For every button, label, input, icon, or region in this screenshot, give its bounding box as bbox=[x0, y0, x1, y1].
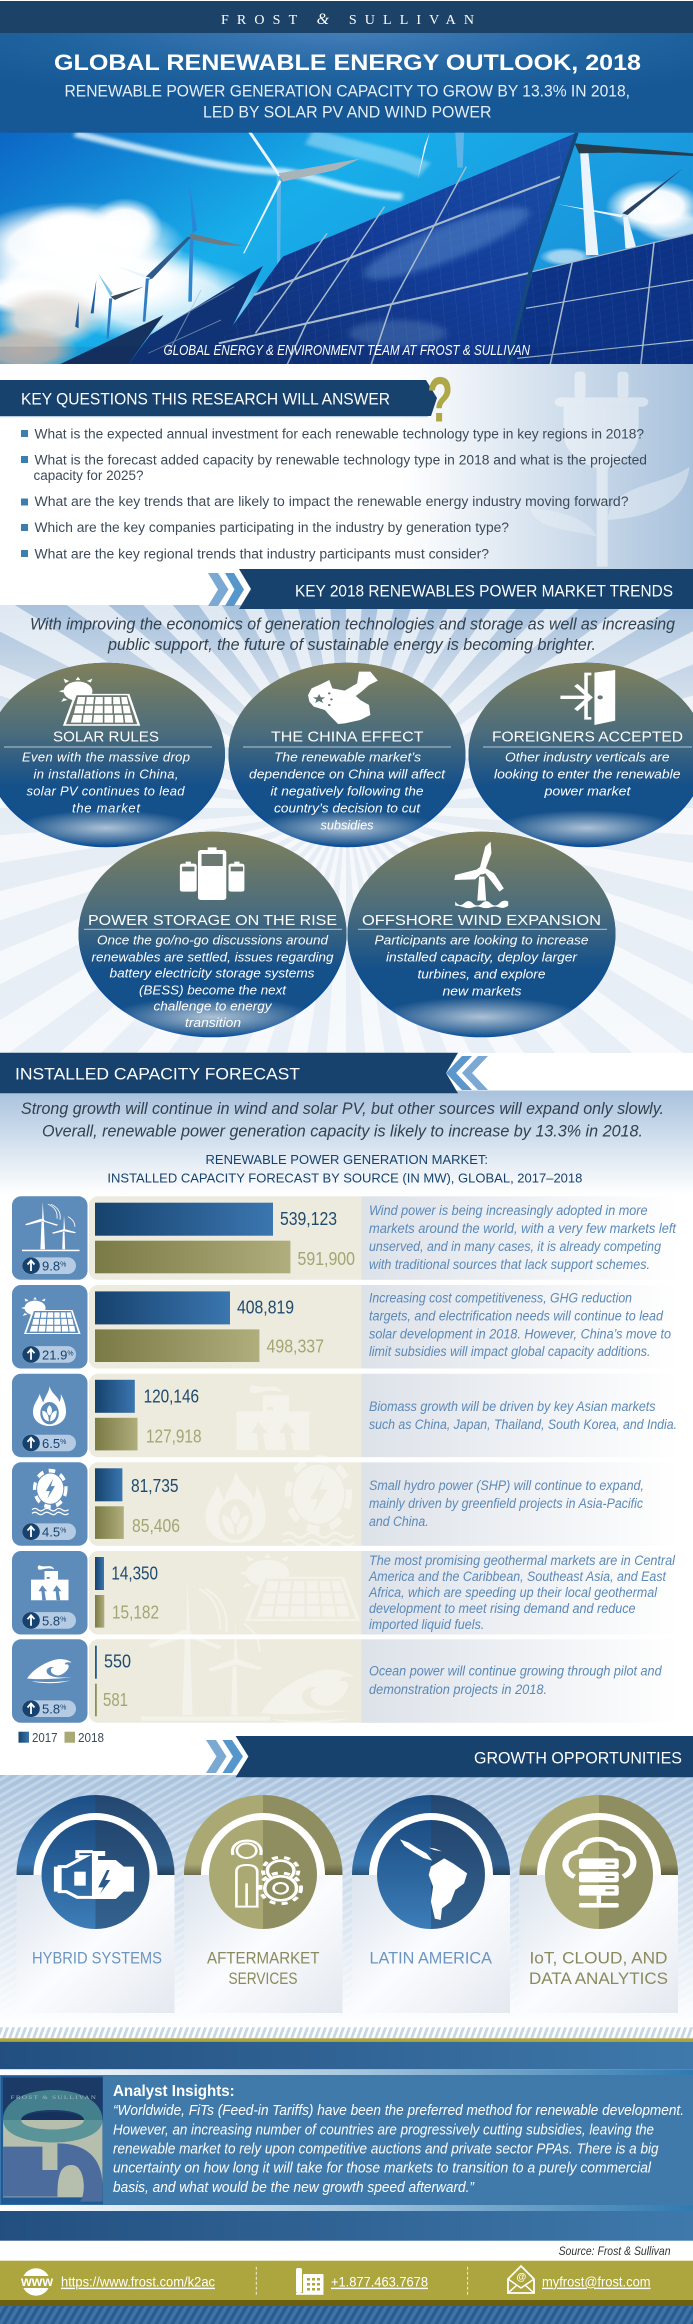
turbines bbox=[75, 133, 693, 338]
row: wind bbox=[12, 1196, 677, 1280]
chart title bbox=[107, 1152, 582, 1186]
report cover image bbox=[1, 2076, 103, 2204]
row: small hydro: 81,735 bbox=[131, 1475, 178, 1496]
growth badge bbox=[22, 1523, 76, 1540]
panel: key trends background with sunburst bbox=[0, 605, 693, 1053]
question list: What are the key regional trends that industry participants must consider? bbox=[34, 546, 489, 561]
circle: foreigners accepted: Other industry verticals are bbox=[505, 750, 670, 765]
circle: power storage on the rise: Once the go/no-go discussions around bbox=[97, 932, 329, 947]
commentary: wind bbox=[369, 1203, 677, 1272]
icon: telephone bbox=[296, 2268, 324, 2295]
card: aftermarket services bbox=[184, 1795, 342, 2013]
row: solar bbox=[12, 1285, 671, 1368]
icon: plug and leaf watermark bbox=[530, 372, 689, 567]
commentary: geothermal: development to meet rising demand and reduce bbox=[369, 1601, 636, 1616]
card: Latin America: LATIN AMERICA bbox=[370, 1949, 492, 1967]
section heading banner: KEY QUESTIONS THIS RESEARCH WILL ANSWER bbox=[21, 390, 390, 408]
row: ocean: 550 bbox=[104, 1650, 131, 1671]
growth badge: % bbox=[60, 1439, 66, 1446]
question list: What is the expected annual investment for each renewable technology type in key regions in 2018? bbox=[34, 426, 644, 441]
card label: DATA ANALYTICS bbox=[529, 1970, 668, 1988]
growth badge: 9.8 bbox=[42, 1259, 60, 1274]
commentary: solar: solar development in 2018. However, China’s move to bbox=[369, 1326, 671, 1341]
icon: email envelope bbox=[508, 2266, 534, 2293]
row: biomass: 127,918 bbox=[146, 1426, 202, 1447]
commentary: hydro: and China. bbox=[369, 1514, 429, 1529]
circle: power storage on the rise: battery electricity storage systems bbox=[110, 966, 315, 981]
growth badge: % bbox=[60, 1528, 66, 1535]
question list: What are the key trends that are likely to impact the renewable energy industry moving forward? bbox=[34, 494, 628, 509]
circle: solar rules bbox=[0, 663, 225, 847]
section banner: key 2018 trends bbox=[208, 569, 693, 609]
hero photo: solar panels and wind turbines bbox=[0, 133, 693, 373]
growth badge: % bbox=[67, 1350, 74, 1357]
circle: solar rules: solar PV continues to lead bbox=[26, 784, 185, 799]
circle: power storage on the rise: (BESS) become the next bbox=[139, 982, 287, 997]
main title: GLOBAL RENEWABLE ENERGY OUTLOOK, 2018 bbox=[54, 50, 641, 75]
section banner: growth opportunities: GROWTH OPPORTUNITIES bbox=[474, 1749, 682, 1767]
commentary: biomass: Biomass growth will be driven by key Asian markets bbox=[369, 1399, 656, 1414]
panel: analyst insights bbox=[0, 2027, 693, 2241]
icon: batteries bbox=[180, 847, 244, 900]
row: ocean bbox=[12, 1639, 662, 1723]
commentary: wind: markets around the world, with a very few markets left bbox=[369, 1221, 677, 1236]
icon: solar bbox=[21, 1297, 80, 1334]
commentary: hydro: mainly driven by greenfield projects in Asia-Pacific bbox=[369, 1496, 643, 1511]
section banner: installed capacity forecast bbox=[0, 1053, 693, 1093]
circle: solar rules: Even with the massive drop bbox=[22, 750, 190, 765]
circle: offshore wind expansion: Participants are looking to increase bbox=[374, 932, 588, 947]
question list bbox=[21, 426, 647, 561]
circle: the China effect: THE CHINA EFFECT bbox=[271, 729, 424, 746]
analyst quote: basis, and what would be the new growth speed afterward.” bbox=[113, 2179, 475, 2196]
icon: door and entering arrow bbox=[560, 670, 615, 725]
forecast intro text: Strong growth will continue in wind and solar PV, but other sources will expand only slowly. bbox=[21, 1099, 664, 1118]
growth badge bbox=[22, 1612, 76, 1629]
circle: the China effect: dependence on China will affect bbox=[249, 767, 446, 782]
growth badge: 21.9 bbox=[42, 1347, 67, 1362]
growth badge: 5.8 bbox=[42, 1613, 60, 1628]
panel: growth opportunities background bbox=[0, 1775, 693, 2027]
commentary: hydro bbox=[369, 1478, 644, 1529]
icon: ocean wave bbox=[27, 1659, 72, 1683]
circle: foreigners accepted: looking to enter the renewable bbox=[494, 767, 680, 782]
panel: installed capacity background bbox=[0, 1090, 693, 1194]
commentary: geothermal bbox=[368, 1553, 676, 1632]
circle: offshore wind expansion: installed capacity, deploy larger bbox=[386, 949, 578, 964]
growth badge: 5.8 bbox=[42, 1702, 60, 1717]
logo wordmark: FROST & SULLIVAN bbox=[221, 11, 474, 28]
circle: offshore wind expansion bbox=[348, 832, 616, 1037]
circle: the China effect: subsidies bbox=[320, 818, 374, 833]
commentary: geothermal: imported liquid fuels. bbox=[369, 1617, 484, 1632]
website link: https://www.frost.com/k2ac bbox=[61, 2274, 215, 2290]
row: geothermal bbox=[12, 1551, 676, 1634]
commentary: ocean bbox=[369, 1664, 662, 1697]
panels bbox=[60, 315, 164, 364]
circle: solar rules: the market bbox=[72, 801, 141, 816]
card: hybrid systems: HYBRID SYSTEMS bbox=[32, 1949, 162, 1967]
cover logotype: FROST & SULLIVAN bbox=[11, 2095, 96, 2101]
subtitle: LED BY SOLAR PV AND WIND POWER bbox=[203, 103, 492, 121]
analyst heading: Analyst Insights: bbox=[113, 2083, 235, 2100]
chart title: RENEWABLE POWER GENERATION MARKET: bbox=[206, 1152, 488, 1167]
icon: wind turbines bbox=[22, 1202, 80, 1251]
question list: capacity for 2025? bbox=[34, 468, 144, 483]
phone link: +1.877.463.7678 bbox=[331, 2274, 428, 2290]
circle: foreigners accepted: power market bbox=[543, 784, 632, 799]
icon: map of Latin America bbox=[400, 1839, 467, 1920]
row: wind: 591,900 bbox=[298, 1248, 355, 1269]
circle: foreigners accepted: FOREIGNERS ACCEPTED bbox=[492, 729, 683, 746]
forecast intro text bbox=[21, 1099, 664, 1141]
subtitle: RENEWABLE POWER GENERATION CAPACITY TO GROW BY 13.3% IN 2018, bbox=[64, 83, 630, 101]
circle: the China effect bbox=[228, 663, 466, 847]
circle: foreigners accepted bbox=[468, 663, 693, 847]
card: hybrid systems bbox=[16, 1795, 175, 2013]
row: geothermal: 14,350 bbox=[111, 1562, 158, 1583]
icon: www globe: www bbox=[20, 2273, 53, 2289]
icon: technician and gears bbox=[232, 1841, 301, 1907]
commentary: wind: unserved, and in many cases, it is already competing bbox=[369, 1239, 661, 1254]
growth badge: 6.5 bbox=[42, 1436, 60, 1451]
circle: the China effect: country’s decision to cut bbox=[274, 801, 421, 816]
section banner: growth opportunities bbox=[206, 1736, 693, 1777]
legend bbox=[18, 1730, 104, 1745]
circle: power storage on the rise: transition bbox=[185, 1015, 241, 1030]
icon: www globe bbox=[18, 2268, 56, 2296]
icon: hydro gear bbox=[32, 1471, 68, 1515]
circle: power storage on the rise bbox=[78, 832, 346, 1037]
icon: cloud servers bbox=[565, 1839, 633, 1908]
header: Frost & Sullivan logo bar bbox=[0, 1, 693, 33]
analyst quote: uncertainty on how long it will take for those markets to transition to a purely commercial bbox=[113, 2160, 652, 2177]
circle: the China effect: The renewable market’s bbox=[274, 750, 422, 765]
icon: email envelope: @ bbox=[516, 2272, 526, 2283]
growth badge bbox=[22, 1346, 76, 1363]
row: wind: 539,123 bbox=[280, 1208, 337, 1229]
title panel bbox=[0, 33, 693, 133]
commentary: geothermal: America and the Caribbean, Southeast Asia, and East bbox=[368, 1569, 667, 1584]
commentary: geothermal: Africa, which are speeding up their local geothermal bbox=[368, 1585, 658, 1600]
commentary: biomass bbox=[369, 1399, 677, 1432]
row: ocean: 581 bbox=[103, 1689, 128, 1710]
section banner: installed capacity forecast: INSTALLED CAPACITY FORECAST bbox=[15, 1065, 300, 1083]
photo caption: GLOBAL ENERGY & ENVIRONMENT TEAM AT FROST & SULLIVAN bbox=[164, 343, 530, 359]
card label: AFTERMARKET bbox=[207, 1949, 320, 1967]
card label bbox=[207, 1949, 320, 1988]
commentary: ocean: demonstration projects in 2018. bbox=[369, 1682, 547, 1697]
legend: 2018 bbox=[78, 1730, 104, 1745]
commentary: geothermal: The most promising geothermal markets are in Central bbox=[369, 1553, 676, 1568]
growth badge: 4.5 bbox=[42, 1525, 60, 1540]
circle: the China effect: it negatively following the bbox=[270, 784, 424, 799]
trends intro text: public support, the future of sustainable energy is becoming brighter. bbox=[107, 635, 596, 654]
growth badge bbox=[22, 1435, 76, 1451]
commentary: hydro: Small hydro power (SHP) will continue to expand, bbox=[369, 1478, 644, 1493]
row: biomass: 120,146 bbox=[144, 1386, 199, 1407]
circle: power storage on the rise: renewables are settled, issues regarding bbox=[92, 949, 334, 964]
icon: geothermal plant bbox=[31, 1565, 68, 1600]
commentary: solar: Increasing cost competitiveness, GHG reduction bbox=[369, 1290, 632, 1305]
email link: myfrost@frost.com bbox=[542, 2274, 650, 2290]
panel: key questions bbox=[0, 364, 693, 569]
icon: biomass flame bbox=[33, 1386, 66, 1426]
subtitle bbox=[64, 83, 630, 121]
growth badge bbox=[22, 1700, 76, 1717]
analyst quote bbox=[113, 2102, 684, 2196]
circle: offshore wind expansion: turbines, and explore bbox=[418, 966, 546, 981]
source note: Source: Frost & Sullivan bbox=[559, 2244, 671, 2258]
commentary: solar: limit subsidies will impact global capacity additions. bbox=[369, 1344, 650, 1359]
growth badge bbox=[22, 1257, 76, 1274]
growth badge: % bbox=[60, 1705, 66, 1712]
icon: hybrid engine bbox=[54, 1851, 134, 1899]
circle: power storage on the rise: challenge to energy bbox=[154, 999, 273, 1014]
commentary: wind: with traditional sources that lack support schemes. bbox=[369, 1257, 650, 1272]
card: IoT, cloud and data analytics bbox=[519, 1795, 678, 2013]
chart panel backgrounds bbox=[89, 1196, 678, 1723]
chart title: INSTALLED CAPACITY FORECAST BY SOURCE (IN MW), GLOBAL, 2017–2018 bbox=[107, 1171, 582, 1186]
circle: offshore wind expansion: OFFSHORE WIND EXPANSION bbox=[362, 912, 601, 929]
row: small hydro: 85,406 bbox=[132, 1515, 180, 1536]
row: solar: 498,337 bbox=[266, 1336, 324, 1357]
trends intro text bbox=[30, 614, 676, 654]
watermark icons behind bars bbox=[141, 1385, 358, 1723]
card label: SERVICES bbox=[228, 1970, 298, 1988]
commentary: solar: targets, and electrification needs will continue to lead bbox=[369, 1308, 663, 1323]
icon: solar panel and sun bbox=[59, 677, 139, 725]
card: Latin America bbox=[352, 1795, 510, 2013]
row: biomass bbox=[12, 1374, 677, 1457]
section banner: key 2018 trends: KEY 2018 RENEWABLES POWER MARKET TRENDS bbox=[295, 583, 673, 601]
circle: offshore wind expansion: new markets bbox=[442, 983, 522, 998]
legend: 2017 bbox=[32, 1730, 58, 1745]
circle: solar rules: SOLAR RULES bbox=[53, 729, 159, 746]
icon: offshore wind turbine bbox=[454, 842, 508, 908]
growth badge: % bbox=[60, 1262, 66, 1269]
commentary: solar bbox=[369, 1290, 671, 1359]
section heading banner bbox=[0, 380, 437, 417]
commentary: ocean: Ocean power will continue growing through pilot and bbox=[369, 1664, 662, 1679]
icon: map of China bbox=[308, 672, 378, 724]
icon: question mark: ? bbox=[427, 364, 453, 436]
row: small hydro bbox=[12, 1462, 644, 1546]
row: geothermal: 15,182 bbox=[112, 1601, 159, 1622]
question list: Which are the key companies participating in the industry by generation type? bbox=[34, 520, 509, 535]
footer contact bar bbox=[0, 2261, 693, 2324]
card label: IoT, CLOUD, AND bbox=[530, 1949, 668, 1967]
question list: What is the forecast added capacity by renewable technology type in 2018 and what is the projected bbox=[34, 452, 647, 467]
forecast intro text: Overall, renewable power generation capacity is likely to increase by 13.3% in 2018. bbox=[42, 1122, 643, 1141]
row: solar: 408,819 bbox=[237, 1296, 294, 1317]
circle: power storage on the rise: POWER STORAGE ON THE RISE bbox=[88, 912, 337, 929]
card label bbox=[529, 1949, 668, 1988]
circle: solar rules: in installations in China, bbox=[34, 767, 178, 782]
growth badge: % bbox=[60, 1616, 66, 1623]
commentary: wind: Wind power is being increasingly adopted in more bbox=[369, 1203, 648, 1218]
bar chart: capacity by source bbox=[12, 1196, 678, 1723]
